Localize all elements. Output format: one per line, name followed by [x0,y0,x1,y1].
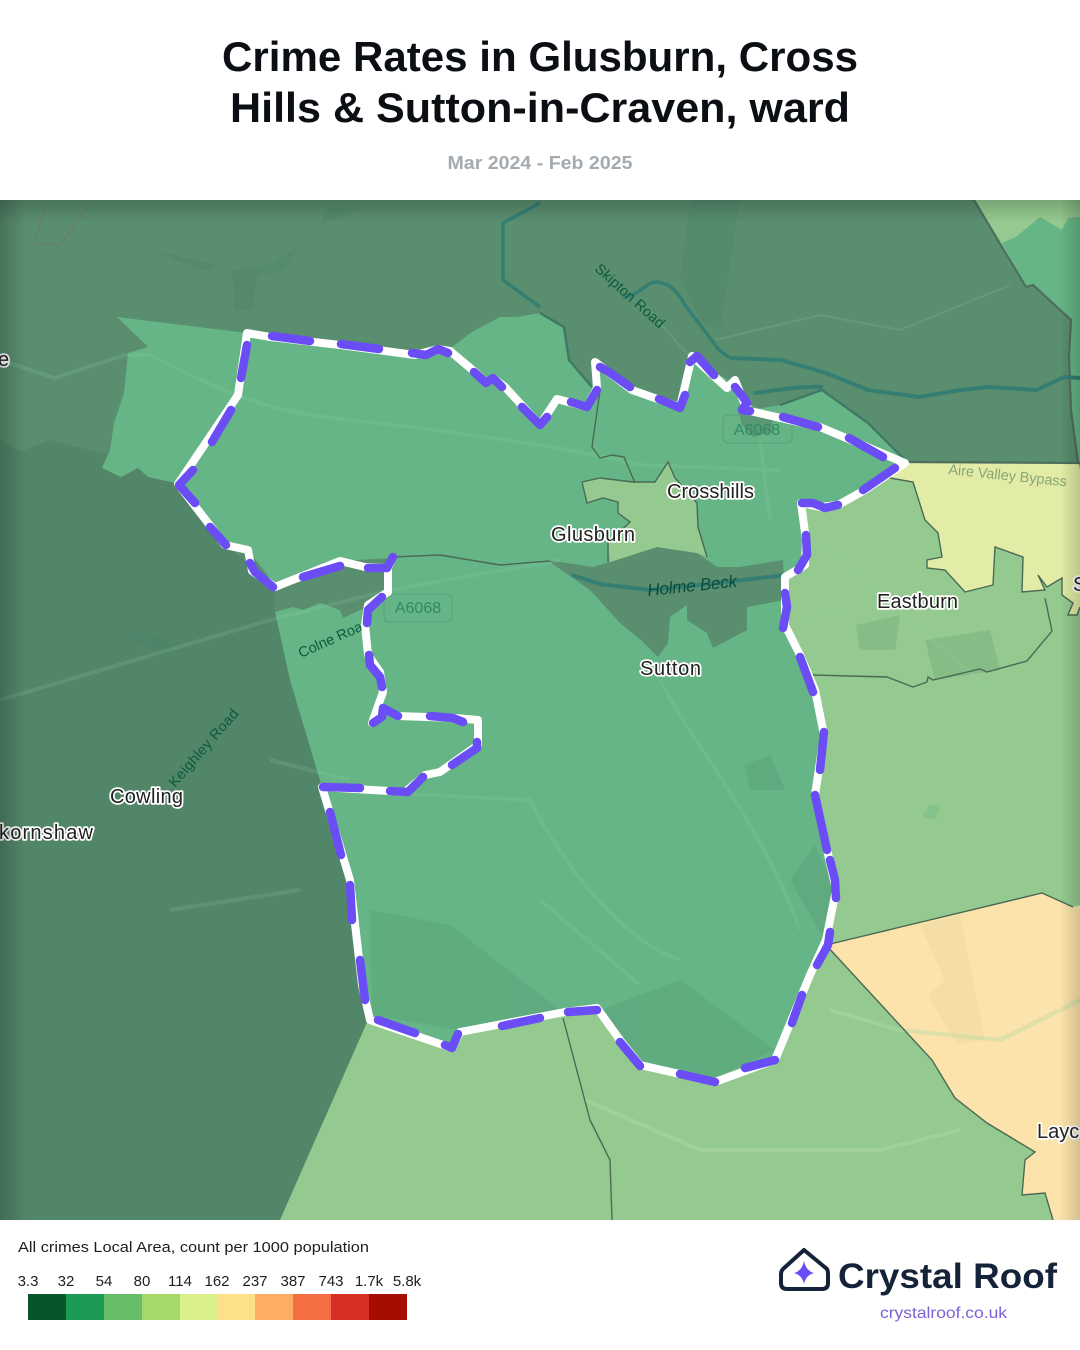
area: dark notch by A6068 [738,406,773,437]
logo [781,1250,1057,1322]
road and beck labels: Aire Valley Bypass [948,462,1068,490]
thin ward boundaries [35,200,1080,1220]
place labels: kornshaw [0,822,94,844]
place labels: Crosshills [667,481,754,503]
title [222,33,858,131]
legend scale values: 387 [280,1273,306,1290]
area: top right wedge [974,200,1080,470]
area: Crosshills lighter zone [582,462,707,562]
legend scale values: 1.7k [355,1273,384,1290]
legend colour bar [28,1294,407,1320]
legend scale values: 743 [318,1273,344,1290]
website: crystalroof.co.uk [880,1305,1008,1322]
roads [0,285,1080,1150]
legend scale values: 162 [204,1273,230,1290]
area: south east pale orange [826,893,1080,1220]
place labels [0,349,1080,1143]
road and beck labels: Colne Roa [296,619,366,662]
area: pale yellow-green zone [890,462,1080,615]
legend scale values [18,1273,422,1290]
legend scale values: 32 [58,1273,74,1290]
darker land patches [370,615,1000,1078]
map edge shading [0,200,1080,1220]
legend scale values: 3.3 [18,1273,38,1290]
area: east light green [785,462,1080,945]
title: Hills & Sutton-in-Craven, ward [230,84,850,131]
place labels: Eastburn [877,591,958,613]
area: south west dark zone [0,440,368,1220]
legend [18,1239,422,1320]
legend scale values: 237 [242,1273,268,1290]
legend scale values: 54 [96,1273,112,1290]
area: ward and neighbouring mid-green zone [102,313,905,1082]
road and beck labels: Keighley Road [166,706,242,791]
place labels: Glusburn [551,524,635,546]
area: Holme Beck dark zone [547,547,785,657]
A6068 road shields [384,415,792,622]
road and beck labels: Skipton Road [591,261,667,332]
icon: house with star [781,1250,828,1289]
ward boundary dashed line [178,333,905,1082]
A6068 road shields: A6068 [395,600,441,617]
date range subtitle: Mar 2024 - Feb 2025 [448,153,632,173]
legend title: All crimes Local Area, count per 1000 population [18,1239,369,1256]
wordmark: Crystal Roof [838,1257,1057,1296]
map [0,200,1080,1220]
area: south light green [280,945,1053,1220]
map base: dark low-crime areas [0,200,1080,1220]
road and beck labels: Holme Beck [646,572,739,600]
legend scale values: 114 [168,1273,192,1290]
road and beck labels [166,261,1068,791]
rivers [503,203,1080,590]
place labels: Cowling [110,786,183,808]
A6068 road shields: A6068 [734,422,780,439]
title: Crime Rates in Glusburn, Cross [222,33,858,80]
legend scale values: 80 [134,1273,150,1290]
place labels: Sutton [640,658,701,680]
legend scale values: 5.8k [393,1273,422,1290]
